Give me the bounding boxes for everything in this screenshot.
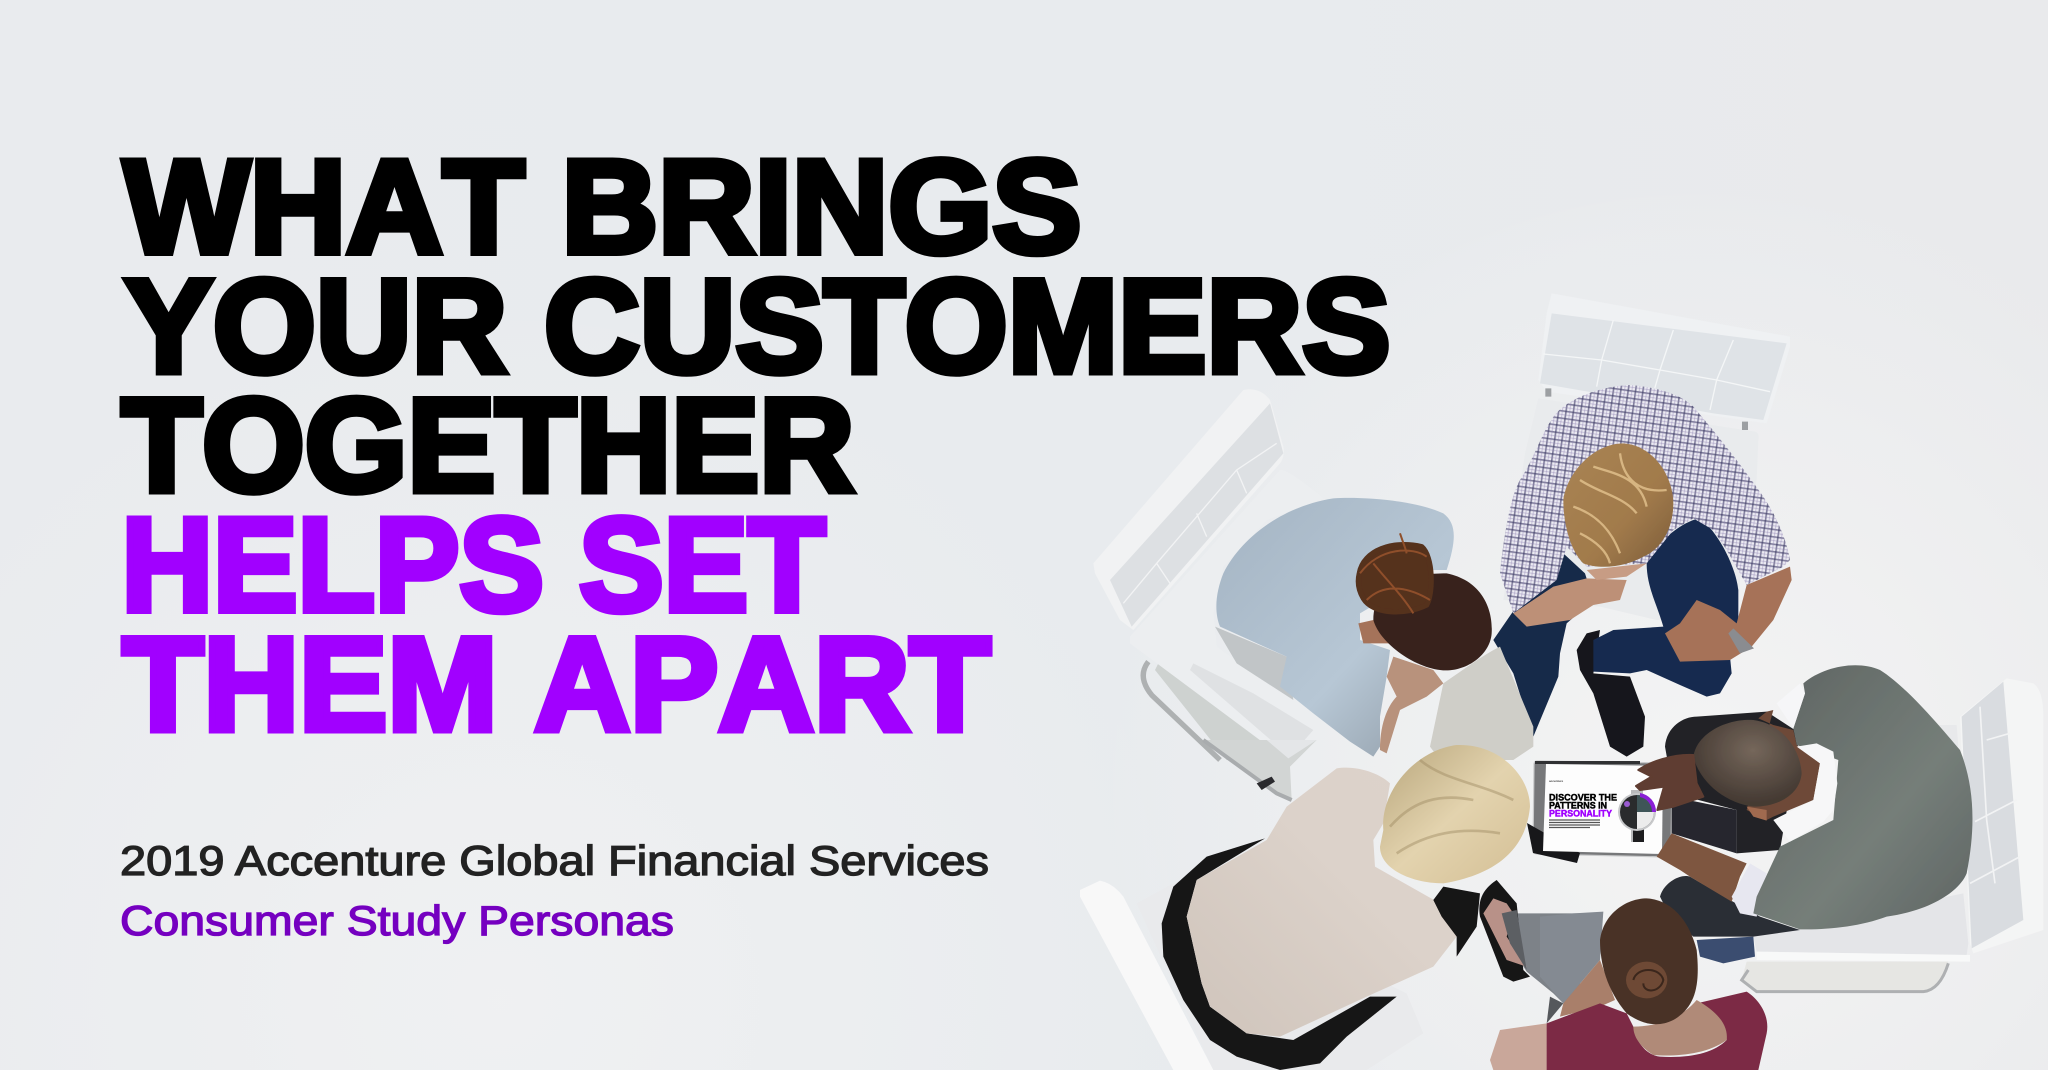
- subtitle: [120, 837, 989, 944]
- chair: bottom left: [1080, 881, 1423, 1070]
- chair: right: [1737, 678, 2043, 992]
- title: YOUR CUSTOMERS: [124, 253, 1390, 401]
- tablet text: DISCOVER THE: [1549, 792, 1617, 802]
- chair: left: [1093, 389, 1323, 760]
- title: HELPS SET: [122, 492, 826, 640]
- person: woman in grey shirt: [1215, 498, 1533, 760]
- tablet text: [1549, 779, 1617, 818]
- chair: left, lower frame: [1203, 740, 1317, 800]
- person: woman in maroon top: [1540, 898, 1767, 1070]
- title: [122, 134, 1390, 759]
- tablet text: PERSONALITY: [1549, 808, 1612, 818]
- chair: top: [1503, 293, 1790, 620]
- title: WHAT BRINGS: [124, 134, 1082, 282]
- person: man in grey sweater: [1636, 665, 1972, 963]
- tablet text: accenture: [1549, 779, 1564, 783]
- person: blonde woman: [1162, 745, 1580, 1070]
- title: THEM APART: [122, 611, 990, 759]
- title: TOGETHER: [122, 372, 854, 520]
- subtitle: Consumer Study Personas: [120, 897, 674, 944]
- tablet: [1527, 761, 1672, 863]
- subtitle: 2019 Accenture Global Financial Services: [120, 837, 989, 884]
- tablet text: PATTERNS IN: [1549, 800, 1607, 810]
- person: man in plaid shirt: [1493, 385, 1792, 757]
- tablet watch graphic: [1618, 790, 1656, 842]
